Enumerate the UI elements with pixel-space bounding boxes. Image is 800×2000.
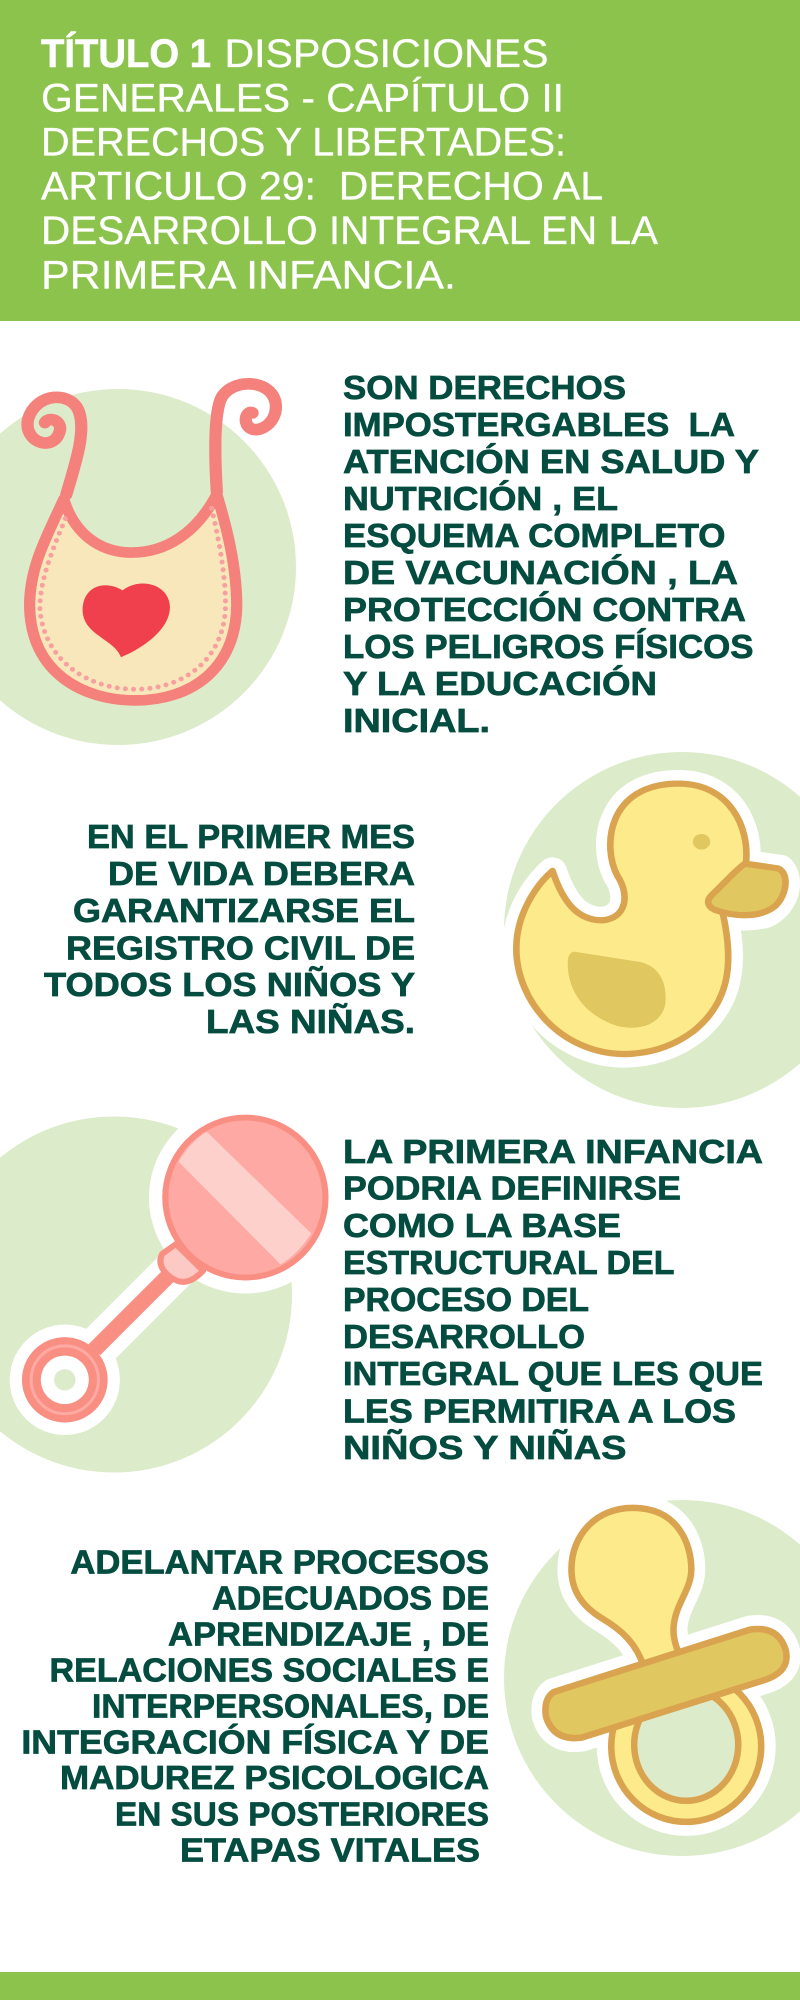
circle behind rattle <box>0 1116 292 1472</box>
header banner <box>0 0 800 321</box>
icon: rattle <box>10 1102 342 1435</box>
text block: procesos de aprendizaje: MADUREZ PSICOLOGICA <box>60 1759 489 1796</box>
text block: primera infancia: DESARROLLO <box>343 1318 585 1355</box>
text block: derechos impostergables: ATENCIÓN EN SALUD Y <box>343 443 759 480</box>
title: DISPOSICIONES <box>224 32 548 76</box>
text block: derechos impostergables <box>343 369 759 739</box>
text block: registro civil: REGISTRO CIVIL DE <box>66 930 415 966</box>
title: ARTICULO 29: DERECHO AL <box>41 165 603 209</box>
icon: bib <box>28 384 276 700</box>
text block: registro civil: TODOS LOS NIÑOS Y <box>44 966 415 1003</box>
pacifier nipple <box>571 1508 691 1664</box>
text block: derechos impostergables: Y LA EDUCACIÓN <box>343 665 657 702</box>
title: PRIMERA INFANCIA. <box>41 253 456 297</box>
pacifier ring <box>611 1671 761 1822</box>
text block: derechos impostergables: ESQUEMA COMPLETO <box>343 517 726 554</box>
rattle stripe <box>179 1132 311 1264</box>
text block: derechos impostergables: DE VACUNACIÓN , LA <box>343 554 738 591</box>
text block: derechos impostergables: INICIAL. <box>343 702 490 739</box>
duck wing <box>568 952 666 1028</box>
text block: primera infancia: ESTRUCTURAL DEL <box>343 1244 674 1281</box>
text block: primera infancia: PROCESO DEL <box>343 1281 589 1318</box>
text block: registro civil: LAS NIÑAS. <box>206 1003 415 1040</box>
text block: primera infancia: NIÑOS Y NIÑAS <box>343 1429 626 1466</box>
text block: procesos de aprendizaje <box>21 1544 489 1868</box>
text block: primera infancia: INTEGRAL QUE LES QUE <box>343 1355 763 1392</box>
title: DERECHOS Y LIBERTADES: <box>41 120 566 164</box>
text block: derechos impostergables: SON DERECHOS <box>343 369 626 406</box>
icon: pacifier <box>545 1508 787 1822</box>
text block: registro civil <box>44 818 415 1040</box>
text block: primera infancia: PODRIA DEFINIRSE <box>343 1170 681 1206</box>
text block: primera infancia: LA PRIMERA INFANCIA <box>343 1133 763 1170</box>
icon: heart <box>83 584 170 657</box>
text block: procesos de aprendizaje: INTEGRACIÓN FÍSICA Y DE <box>21 1724 489 1760</box>
duck beak <box>708 864 786 915</box>
text block: derechos impostergables: LOS PELIGROS FÍSICOS <box>343 628 754 665</box>
rattle ring <box>22 1337 108 1422</box>
text block: registro civil: DE VIDA DEBERA <box>108 855 415 892</box>
text block: derechos impostergables: NUTRICIÓN , EL <box>343 480 618 517</box>
text block: registro civil: GARANTIZARSE EL <box>73 892 415 929</box>
text block: derechos impostergables: IMPOSTERGABLES LA <box>343 406 735 443</box>
footer band <box>0 1972 800 2000</box>
text block: procesos de aprendizaje: EN SUS POSTERIORES <box>115 1795 489 1832</box>
text block: primera infancia: COMO LA BASE <box>343 1207 621 1244</box>
text block: procesos de aprendizaje: APRENDIZAJE , DE <box>168 1615 489 1652</box>
title: TÍTULO 1 <box>41 31 211 76</box>
icon: duck <box>516 784 786 1054</box>
text block: procesos de aprendizaje: ADELANTAR PROCESOS <box>70 1544 489 1580</box>
circle behind bib <box>0 389 296 745</box>
text block: procesos de aprendizaje: ADECUADOS DE <box>212 1580 489 1617</box>
title: DESARROLLO INTEGRAL EN LA <box>41 209 658 253</box>
circle behind duck <box>504 752 800 1108</box>
title <box>41 31 658 297</box>
text block: primera infancia <box>343 1133 763 1466</box>
text block: procesos de aprendizaje: RELACIONES SOCIALES E <box>50 1652 489 1688</box>
pacifier shield <box>545 1629 787 1738</box>
text block: procesos de aprendizaje: ETAPAS VITALES <box>180 1832 480 1868</box>
text block: procesos de aprendizaje: INTERPERSONALES, DE <box>92 1688 489 1725</box>
text block: registro civil: EN EL PRIMER MES <box>87 818 415 855</box>
duck eye <box>693 834 710 850</box>
text block: primera infancia: LES PERMITIRA A LOS <box>343 1392 736 1430</box>
title: GENERALES - CAPÍTULO II <box>41 76 564 120</box>
text block: derechos impostergables: PROTECCIÓN CONTRA <box>343 591 746 628</box>
circle behind pacifier <box>504 1500 800 1856</box>
